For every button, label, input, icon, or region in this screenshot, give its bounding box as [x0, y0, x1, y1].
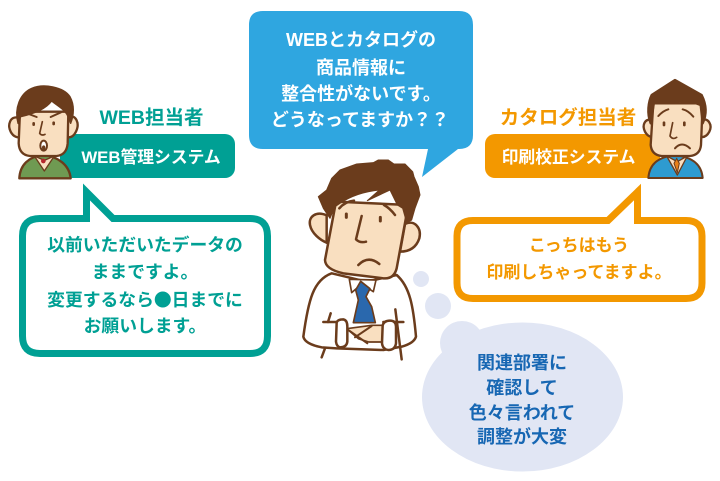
icon: thought cloud	[413, 271, 623, 472]
text: orange bubble message: こっちはもう	[529, 236, 629, 255]
panel: blue speech bubble	[249, 11, 473, 177]
icon: WEB staff character	[9, 86, 78, 178]
label box: 印刷校正システム	[485, 134, 660, 178]
text: thought message: 確認して	[486, 378, 558, 398]
text: teal bubble message: 変更するなら●日までに	[47, 286, 243, 312]
text: teal bubble message: お願いします。	[84, 316, 206, 336]
text: teal bubble message: ままですよ。	[92, 262, 198, 282]
text: blue bubble message: 整合性がないです。	[281, 83, 441, 104]
icon: worried man with crossed arms	[303, 160, 420, 359]
label box: 印刷校正システム: 印刷校正システム	[502, 147, 635, 167]
text: orange bubble message: 印刷しちゃってますよ。	[486, 262, 672, 282]
text: orange bubble message	[486, 236, 672, 282]
text: blue bubble message: WEBとカタログの	[286, 29, 436, 50]
text: thought message	[469, 353, 575, 447]
text: teal bubble message: 以前いただいたデータの	[47, 234, 243, 255]
panel: teal speech bubble	[22, 192, 268, 354]
label box: WEB管理システム: WEB管理システム	[81, 147, 221, 167]
label: カタログ担当者: カタログ担当者	[500, 106, 636, 129]
text: blue bubble message	[271, 29, 449, 130]
label: WEB担当者: WEB担当者	[100, 106, 204, 129]
text: thought message: 調整が大変	[477, 426, 567, 447]
text: thought message: 関連部署に	[477, 353, 567, 373]
text: teal bubble message	[47, 234, 243, 336]
text: blue bubble message: どうなってますか？？	[271, 110, 449, 130]
icon: catalog staff character	[644, 80, 710, 178]
text: thought message: 色々言われて	[469, 402, 575, 423]
panel: orange speech bubble	[457, 192, 702, 298]
label box: WEB管理システム	[60, 134, 235, 178]
text: blue bubble message: 商品情報に	[316, 58, 406, 78]
